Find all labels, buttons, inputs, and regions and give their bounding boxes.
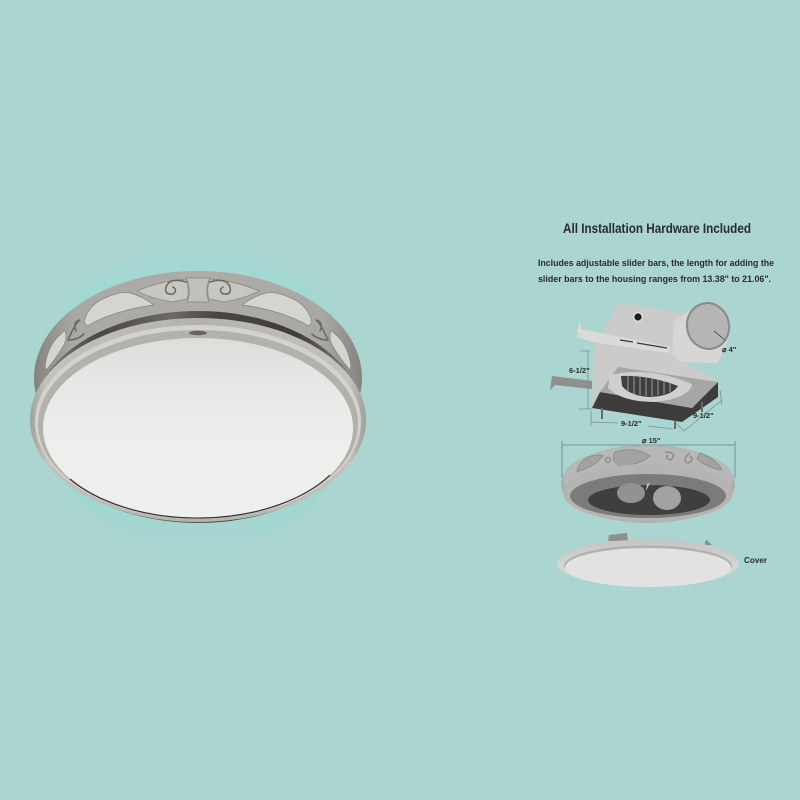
label: depth: 9-1/2": [693, 411, 714, 420]
lens cover: [43, 338, 353, 518]
trim ring diagram: [561, 436, 735, 523]
ring panels: [577, 450, 722, 472]
title: All Installation Hardware Included: [563, 221, 751, 236]
cover diagram: [557, 533, 768, 587]
cover tabs: [608, 533, 712, 545]
description line 2: slider bars to the housing ranges from 13.38" to 21.06".: [538, 274, 771, 285]
ring outer body: [561, 445, 735, 523]
dimension lines: [579, 351, 722, 431]
ring ornamental top: [563, 446, 733, 510]
cover lens ring: [564, 546, 732, 586]
fan blades: [621, 376, 678, 397]
icon: halo behind fixture: [36, 246, 360, 550]
rim inner ring: [38, 330, 358, 518]
background gap: [646, 483, 650, 491]
label: 4 inch diameter: ⌀ 4": [722, 345, 737, 354]
dark tray: [592, 382, 718, 422]
ring dark interior: [588, 485, 710, 515]
lens lower dark edge: [70, 475, 330, 518]
label: cover: Cover: [744, 555, 768, 565]
ring bottom face: [563, 464, 733, 522]
duct collar: [672, 306, 728, 363]
duct opening: [683, 299, 733, 353]
bulb right: [653, 486, 681, 510]
ring inner recess: [570, 474, 726, 518]
duct pointer: [714, 331, 725, 340]
housing diagram: [550, 299, 737, 431]
description line 1: Includes adjustable slider bars, the length for adding the: [538, 258, 774, 269]
left slider bar: [550, 376, 592, 390]
dark groove: [33, 311, 363, 523]
product photo: ceiling fan light fixture: [30, 271, 366, 523]
tray legs: [602, 402, 702, 429]
ring scrolls: [606, 452, 692, 463]
cover outer: [557, 540, 739, 586]
band scrolls: [68, 280, 328, 340]
label: 15 inch diameter: ⌀ 15": [642, 436, 661, 445]
slider slots: [620, 340, 667, 348]
label: width: 9-1/2": [621, 419, 642, 428]
housing box: [592, 302, 718, 405]
cover lens: [565, 548, 731, 587]
description text: [538, 258, 774, 285]
diameter dimension: [562, 441, 735, 478]
label: height: 6-1/2": [569, 366, 590, 375]
fixture decorative band: [34, 271, 362, 394]
fan ring: [608, 372, 692, 402]
top slider bar: [577, 320, 671, 353]
outer rim: [30, 318, 366, 522]
bulb left: [617, 483, 645, 503]
knockout hole: [633, 312, 643, 322]
rim highlight ring: [35, 325, 361, 519]
fan mounting plate: [600, 367, 718, 408]
band panels: [45, 278, 351, 370]
rim reflection: [189, 331, 207, 335]
